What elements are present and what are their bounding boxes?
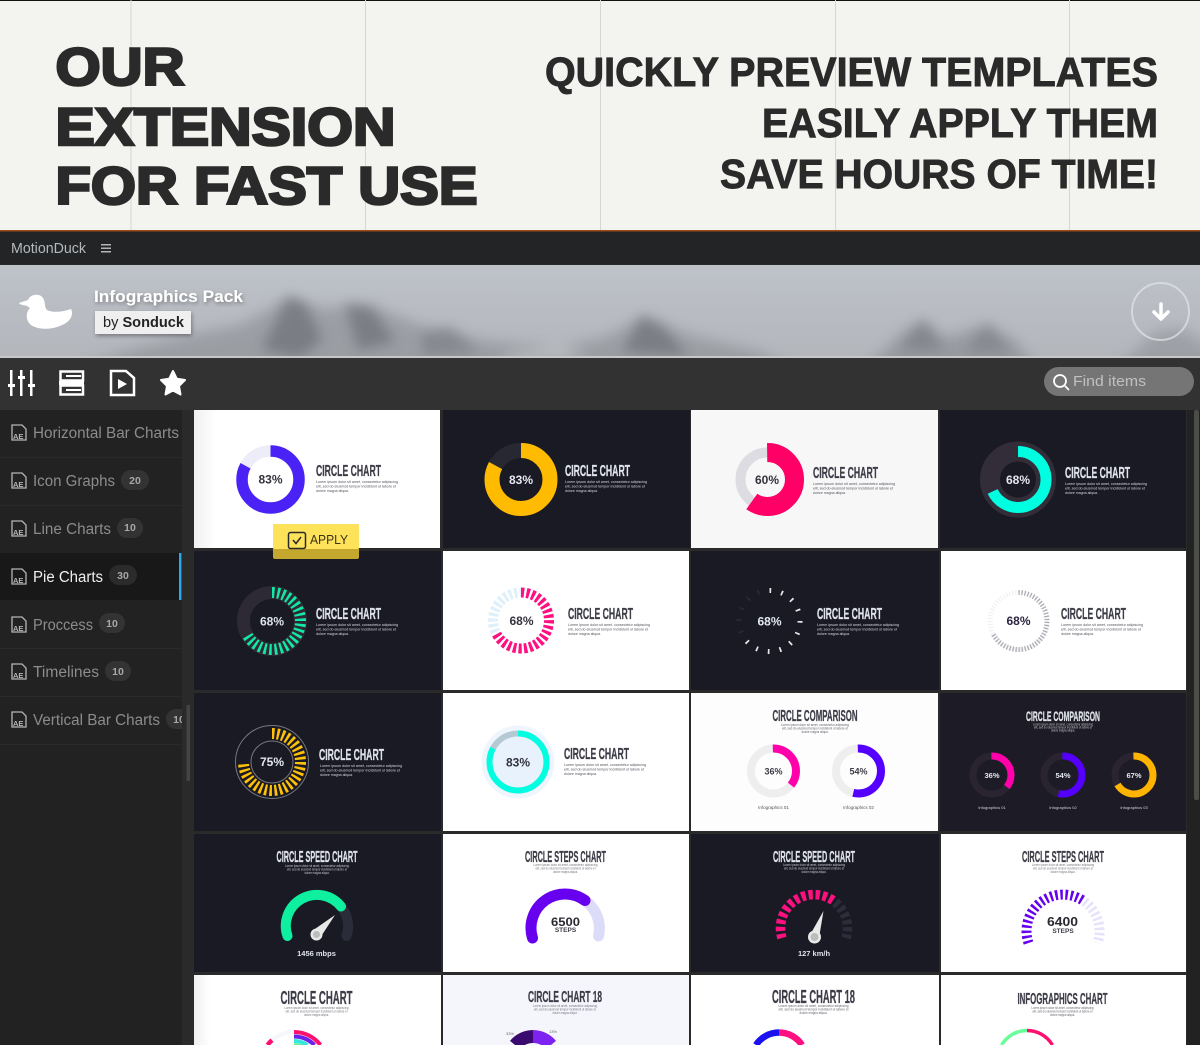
description: dolore magna aliqua. <box>304 871 330 875</box>
icon: video file <box>111 371 134 395</box>
tick ring chart <box>739 590 800 652</box>
description: dolore magna aliqua. <box>813 491 846 495</box>
description: elit, sed do eiusmod tempor incididunt ut labore et <box>1033 866 1093 870</box>
needle <box>808 911 824 944</box>
header band <box>0 0 1200 230</box>
donut: 54%: Infographics 02 <box>843 805 874 810</box>
author tag <box>95 311 191 334</box>
gauge chart <box>286 895 348 958</box>
right scrollbar <box>1187 410 1200 1045</box>
description: Lorem ipsum dolor sit amet, consectetur adipiscing <box>320 764 402 768</box>
description: elit, sed do eiusmod tempor incididunt ut labore et <box>286 1010 348 1014</box>
description <box>316 623 398 636</box>
ring chart <box>1002 1030 1052 1045</box>
description: elit, sed do eiusmod tempor incididunt ut labore et <box>565 484 645 488</box>
description: Lorem ipsum dolor sit amet, consectetur adipiscing <box>316 480 398 484</box>
card: ring chart 75% yellow <box>194 693 441 831</box>
card: circle chart 18 ring <box>691 975 939 1045</box>
menu item: Pie Charts (active): AE <box>13 576 23 585</box>
description <box>564 763 646 776</box>
segmented donut chart: 68% <box>260 614 284 628</box>
description <box>778 1004 848 1015</box>
icon: download button <box>1132 283 1189 340</box>
description: Lorem ipsum dolor sit amet, consectetur adipiscing <box>1065 482 1147 486</box>
description: Lorem ipsum dolor sit amet, consectetur adipiscing <box>781 723 849 727</box>
card: infographics chart: INFOGRAPHICS CHART <box>1018 991 1108 1008</box>
donut: 36%: Infographics 01 <box>978 805 1006 810</box>
description: Lorem ipsum dolor sit amet, consectetur adipiscing <box>778 1004 848 1008</box>
ring chart <box>756 1032 802 1045</box>
segmented donut chart <box>244 592 300 650</box>
tick ring chart <box>990 592 1047 650</box>
description: Lorem ipsum dolor sit amet, consectetur adipiscing <box>1033 722 1093 726</box>
donut: 36%: 36% <box>764 766 783 776</box>
description: Lorem ipsum dolor sit amet, consectetur adipiscing <box>284 1006 348 1010</box>
menu item: Proccess: AE <box>13 624 23 633</box>
donut chart <box>492 450 550 508</box>
description: elit, sed do eiusmod tempor incididunt ut labore et <box>564 768 644 772</box>
description: Lorem ipsum dolor sit amet, consectetur adipiscing <box>783 863 845 867</box>
menu item: Horizontal Bar Charts: Horizontal Bar Charts <box>33 425 179 442</box>
tagline <box>545 49 1158 197</box>
description: elit, sed do eiusmod tempor incididunt ut labore et <box>1065 486 1145 490</box>
menu item: Icon Graphs: 20 <box>129 475 141 487</box>
menu item: Vertical Bar Charts: 10 <box>173 714 185 726</box>
title: CIRCLE CHART 18 <box>772 987 855 1007</box>
description: elit, sed do eiusmod tempor incididunt ut labore et <box>784 866 844 870</box>
menu item: Vertical Bar Charts: AE <box>13 719 23 728</box>
apply button: APPLY <box>310 532 348 547</box>
tagline: QUICKLY PREVIEW TEMPLATES <box>545 49 1158 95</box>
donut: 54%: Infographics 02 <box>1049 805 1077 810</box>
apply button <box>273 524 359 559</box>
app name: MotionDuck <box>11 241 87 257</box>
description <box>1033 722 1093 732</box>
card: circle comparison dark <box>940 693 1186 831</box>
card: speed chart pink: CIRCLE SPEED CHART <box>773 849 855 866</box>
menu item: Line Charts: Line Charts <box>33 521 111 538</box>
title: CIRCLE CHART 18 <box>528 989 602 1006</box>
description: elit, sed do eiusmod tempor incididunt ut labore et <box>813 486 893 490</box>
card: circle comparison dark: CIRCLE COMPARISON <box>1026 708 1100 724</box>
tagline: SAVE HOURS OF TIME! <box>720 151 1158 197</box>
description <box>1032 863 1094 874</box>
description: dolore magna aliqua. <box>800 1011 828 1015</box>
donut chart <box>740 452 794 506</box>
card: circle chart multi-arc <box>194 975 441 1045</box>
description <box>285 864 349 875</box>
pie chart: 13% <box>549 1029 557 1034</box>
description: Lorem ipsum dolor sit amet, consectetur adipiscing <box>817 623 899 627</box>
donut chart <box>990 452 1046 508</box>
sidebar scrollbar <box>186 705 190 781</box>
description: Lorem ipsum dolor sit amet, consectetur adipiscing <box>534 863 598 867</box>
description: dolore magna aliqua. <box>316 632 349 636</box>
description: elit, sed do eiusmod tempor incididunt ut labore et <box>817 628 897 632</box>
card: ring chart 83% cyan <box>443 693 689 831</box>
search box <box>1044 367 1194 396</box>
description <box>284 1006 348 1017</box>
menu item: Proccess <box>12 613 125 634</box>
icon: star <box>161 371 185 394</box>
description: elit, sed do eiusmod tempor incididunt ut labore et <box>782 726 848 730</box>
donut: 67% <box>1115 756 1153 810</box>
donut: 36% <box>973 756 1011 810</box>
sidebar <box>0 424 182 729</box>
menu item: Timelines: 10 <box>112 666 124 678</box>
menu item: Line Charts: 10 <box>124 522 136 534</box>
main title <box>56 38 478 216</box>
card: tick chart 68% light <box>941 551 1186 690</box>
title: CIRCLE CHART <box>817 606 882 623</box>
toolbar <box>0 358 1200 410</box>
description: elit, sed do eiusmod tempor incididunt ut labore et <box>536 866 596 870</box>
segmented donut chart: 68% <box>509 614 534 628</box>
tick ring chart: 68% <box>757 614 782 628</box>
menu item: Pie Charts (active): Pie Charts <box>33 569 103 586</box>
description: dolore magna aliqua. <box>320 773 353 777</box>
tick ring chart: 68% <box>1006 614 1031 628</box>
concentric arc chart <box>268 1032 320 1045</box>
description: Lorem ipsum dolor sit amet, consectetur adipiscing <box>1032 1006 1094 1010</box>
donut: 36%: Infographics 01 <box>758 805 789 810</box>
menu item: Vertical Bar Charts <box>12 709 192 729</box>
donut: 54%: 54% <box>1055 771 1071 780</box>
card: circle chart 60% pink <box>691 410 938 548</box>
description: dolore magna aliqua. <box>1050 870 1076 874</box>
segmented ring chart <box>236 726 308 798</box>
card: circle chart 83% blue <box>194 410 440 548</box>
description: Lorem ipsum dolor sit amet, consectetur adipiscing <box>568 623 650 627</box>
card: infographics chart <box>941 975 1186 1045</box>
title: CIRCLE CHART <box>813 465 878 482</box>
description: elit, sed do eiusmod tempor incididunt ut labore et <box>316 484 396 488</box>
description: elit, sed do eiusmod tempor incididunt ut labore et <box>1061 628 1141 632</box>
menu item: Timelines <box>12 661 131 681</box>
description: elit, sed do eiusmod tempor incididunt ut labore et <box>1034 726 1092 730</box>
gauge chart: STEPS <box>1052 928 1074 935</box>
description <box>783 863 845 874</box>
card: segmented chart 68% pink <box>443 551 689 690</box>
menu item: Horizontal Bar Charts: AE <box>13 432 23 441</box>
menu item: Line Charts <box>12 518 143 538</box>
description: elit, sed do eiusmod tempor incididunt ut labore et <box>778 1008 848 1012</box>
card: circle comparison light <box>691 693 938 831</box>
donut chart: 60% <box>755 473 779 487</box>
menu item: Timelines: AE <box>13 671 23 680</box>
title: CIRCLE CHART <box>565 463 630 480</box>
card: steps chart ticks <box>941 834 1186 972</box>
main title: FOR FAST USE <box>56 157 478 216</box>
description: dolore magna aliqua. <box>1050 1013 1075 1017</box>
donut: 36% <box>751 748 796 810</box>
pack name: Infographics Pack <box>94 287 244 306</box>
gauge chart <box>1026 895 1100 943</box>
description: Lorem ipsum dolor sit amet, consectetur adipiscing <box>1032 863 1094 867</box>
description <box>534 863 598 874</box>
description: Lorem ipsum dolor sit amet, consectetur adipiscing <box>813 482 895 486</box>
description: elit, sed do eiusmod tempor incididunt ut labore et <box>287 868 347 872</box>
main title: EXTENSION <box>56 98 396 157</box>
description: Lorem ipsum dolor sit amet, consectetur adipiscing <box>533 1004 597 1008</box>
description: dolore magna aliqua. <box>552 1011 578 1015</box>
description: dolore magna aliqua. <box>565 489 598 493</box>
description: dolore magna aliqua. <box>1051 728 1075 732</box>
main title: OUR <box>56 38 184 97</box>
title: CIRCLE CHART <box>568 606 633 623</box>
description: dolore magna aliqua. <box>817 632 850 636</box>
description <box>1032 1006 1094 1017</box>
description <box>781 723 849 734</box>
description: dolore magna aliqua. <box>564 772 597 776</box>
title: CIRCLE CHART <box>319 747 384 764</box>
description: dolore magna aliqua. <box>1061 632 1094 636</box>
menu item: Line Charts: AE <box>13 528 23 537</box>
ring chart <box>482 726 554 798</box>
description <box>1065 482 1147 495</box>
menu item: Timelines: Timelines <box>33 664 99 681</box>
donut chart: 83% <box>509 473 533 487</box>
app title bar <box>0 230 1200 264</box>
description: Lorem ipsum dolor sit amet, consectetur adipiscing <box>565 480 647 484</box>
pie chart <box>506 1029 557 1045</box>
description: elit, sed do eiusmod tempor incididunt ut labore et <box>534 1008 596 1012</box>
card: circle comparison light: CIRCLE COMPARISON <box>772 708 858 725</box>
card: segmented chart 68% teal <box>194 551 441 690</box>
gauge chart: 6500 <box>551 915 580 929</box>
description <box>813 482 895 495</box>
author tag: by Sonduck <box>103 314 185 331</box>
icon: list view <box>59 372 84 394</box>
ring chart: 83% <box>506 756 530 770</box>
description: dolore magna aliqua. <box>316 489 349 493</box>
icon: check box <box>288 532 306 548</box>
search box: Find items <box>1073 373 1146 390</box>
card: steps chart purple: CIRCLE STEPS CHART <box>525 849 606 866</box>
gauge chart <box>780 895 848 958</box>
donut: 54%: 54% <box>849 766 868 776</box>
needle <box>310 915 335 940</box>
icon: duck logo <box>19 295 72 329</box>
donut: 36%: 36% <box>984 771 1000 780</box>
donut: 54% <box>1044 756 1082 810</box>
menu item: Proccess: 10 <box>106 618 118 630</box>
icon: hamburger menu <box>101 244 111 252</box>
description: dolore magna aliqua. <box>802 870 826 874</box>
description: elit, sed do eiusmod tempor incididunt ut labore et <box>316 628 396 632</box>
description <box>533 1004 597 1015</box>
donut chart: 68% <box>1006 473 1030 487</box>
card: speed chart green <box>194 834 441 972</box>
card: speed chart green: CIRCLE SPEED CHART <box>276 849 358 866</box>
menu item: Icon Graphs <box>12 470 149 490</box>
menu item: Icon Graphs: Icon Graphs <box>33 473 115 490</box>
description: elit, sed do eiusmod tempor incididunt ut labore et <box>320 768 400 772</box>
icon: sliders <box>8 370 35 396</box>
description: Lorem ipsum dolor sit amet, consectetur adipiscing <box>564 763 646 767</box>
donut: 67%: 67% <box>1126 771 1142 780</box>
description <box>320 764 402 777</box>
menu item: Icon Graphs: AE <box>13 480 23 489</box>
description <box>1061 623 1143 636</box>
menu item: Proccess: Proccess <box>33 617 93 634</box>
menu item: Pie Charts (active) <box>0 553 182 600</box>
gauge chart <box>531 894 599 938</box>
description: elit, sed do eiusmod tempor incididunt ut labore et <box>1032 1010 1092 1014</box>
donut: 54% <box>836 748 881 810</box>
card: circle chart 68% cyan <box>940 410 1186 548</box>
donut chart: 83% <box>258 472 283 486</box>
gauge chart: 1456 mbps <box>297 949 336 958</box>
description: Lorem ipsum dolor sit amet, consectetur adipiscing <box>316 623 398 627</box>
segmented ring chart: 75% <box>260 755 284 769</box>
donut chart <box>242 451 299 508</box>
card: tick chart 68% dark <box>691 551 939 690</box>
title: CIRCLE CHART <box>1065 465 1130 482</box>
card: steps chart purple <box>443 834 689 972</box>
description: elit, sed do eiusmod tempor incididunt ut labore et <box>568 628 648 632</box>
title: CIRCLE CHART <box>316 463 381 480</box>
description: dolore magna aliqua. <box>568 632 601 636</box>
title: CIRCLE CHART <box>280 988 352 1008</box>
title: CIRCLE CHART <box>1061 606 1126 623</box>
menu item: Pie Charts (active): 30 <box>117 570 129 582</box>
description: Lorem ipsum dolor sit amet, consectetur adipiscing <box>285 864 349 868</box>
pie chart: 33% <box>506 1031 514 1036</box>
description <box>565 480 647 493</box>
description: dolore magna aliqua. <box>1065 491 1098 495</box>
title: CIRCLE CHART <box>316 606 381 623</box>
segmented donut chart <box>493 592 549 648</box>
description <box>316 480 398 493</box>
description: dolore magna aliqua. <box>553 870 578 874</box>
description <box>817 623 899 636</box>
description <box>568 623 650 636</box>
description: dolore magna aliqua. <box>802 730 828 734</box>
card: circle chart 18 pie <box>443 975 689 1045</box>
gauge chart: 127 km/h <box>798 949 830 958</box>
card: speed chart pink <box>691 834 939 972</box>
gauge chart: 6400 <box>1047 915 1078 929</box>
description: Lorem ipsum dolor sit amet, consectetur adipiscing <box>1061 623 1143 627</box>
card: circle chart 83% yellow <box>443 410 690 548</box>
tagline: EASILY APPLY THEM <box>762 100 1158 146</box>
donut: 67%: Infographics 03 <box>1120 805 1148 810</box>
card: steps chart ticks: CIRCLE STEPS CHART <box>1022 849 1104 866</box>
menu item: Vertical Bar Charts: Vertical Bar Charts <box>33 712 160 729</box>
banner <box>0 265 1200 358</box>
gauge chart: STEPS <box>555 927 577 934</box>
title: CIRCLE CHART <box>564 746 629 763</box>
description: dolore magna aliqua. <box>304 1013 329 1017</box>
